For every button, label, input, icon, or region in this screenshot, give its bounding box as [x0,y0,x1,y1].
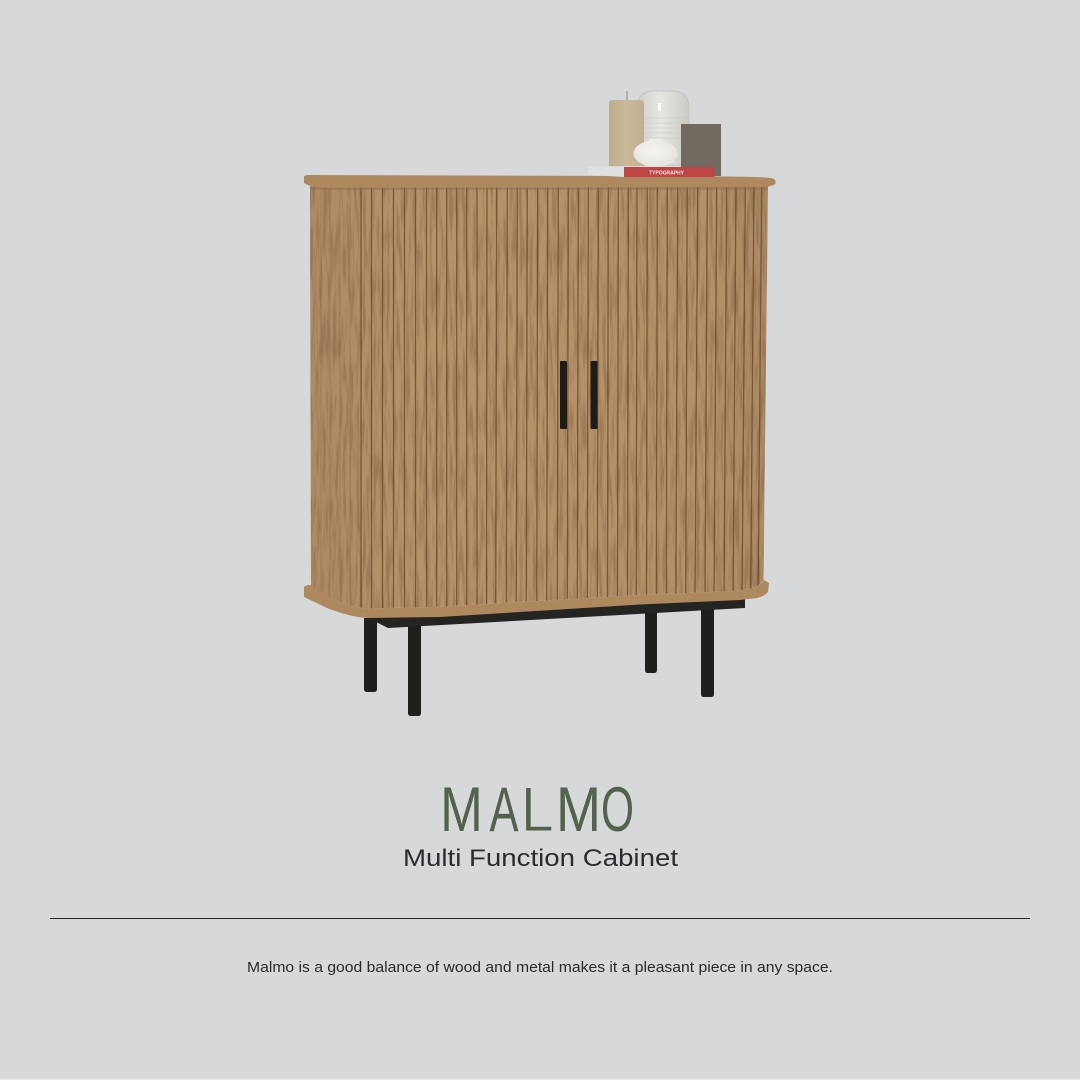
decor: candle [609,91,644,166]
subtitle: Multi Function Cabinet [403,845,678,872]
title: M [440,775,483,845]
title: L [521,775,554,845]
black metal rail [364,599,745,628]
divider line [50,918,1030,919]
cabinet top slab [304,175,776,188]
title [440,775,634,845]
description: Malmo is a good balance of wood and metal makes it a pleasant piece in any space. [247,960,833,976]
title: M [556,775,601,845]
decor: vase [637,91,689,165]
product: cabinet with decor [304,91,776,716]
door handles [560,361,598,429]
title: A [490,775,518,845]
cabinet legs [364,608,714,716]
cabinet body with slats [305,185,775,615]
decor: book: TYPOGRAPHY [649,170,685,176]
decor: book [588,166,714,177]
decor: concrete block [681,124,721,176]
decor: white pot [634,139,678,167]
cabinet base plinth [304,580,769,618]
title: O [601,775,634,845]
